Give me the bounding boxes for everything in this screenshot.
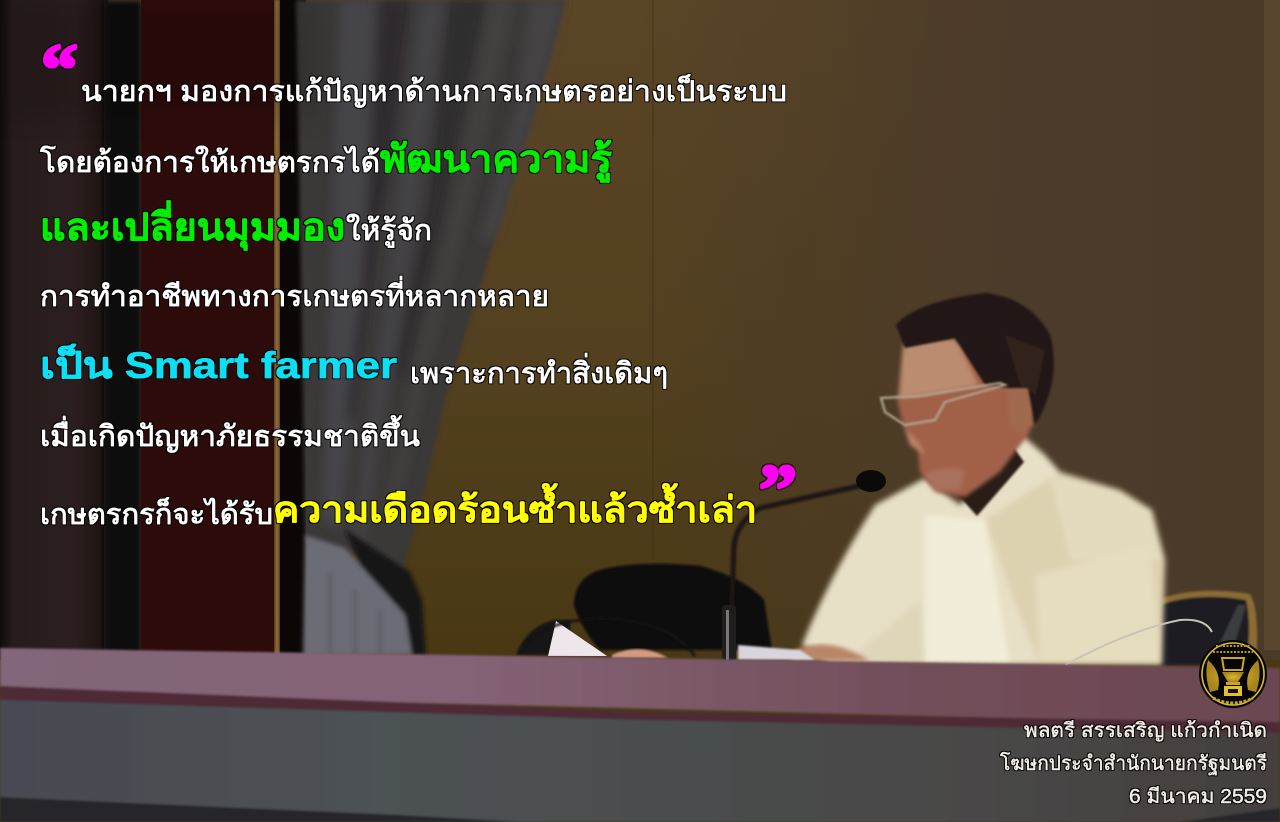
line 1: นายกฯ มองการแก้ปัญหาด้านการเกษตรอย่างเป็นระบบ [81,73,787,108]
person: collar [958,445,1024,516]
line 7 [40,483,757,531]
icon: government seal [1199,640,1267,708]
attribution: date: 6 มีนาคม 2559 [1129,786,1267,808]
icon: closing quote mark: ” [759,450,797,530]
person: hair [896,293,1054,425]
person: head [897,338,1040,497]
paper [548,621,607,656]
left dark panel [0,0,108,660]
line 2: โดยต้องการให้เกษตรกรได้ [40,145,380,179]
line 2: พัฒนาความรู้ [380,139,613,183]
table top [0,648,1280,822]
line 7: เกษตรกรก็จะได้รับ [40,496,273,531]
line 7: ความเดือดร้อนซ้ำแล้วซ้ำเล่า [273,483,757,530]
person: jacket [802,435,1165,665]
line 3: และเปลี่ยนมุมมอง [40,200,345,251]
chair left [574,564,772,650]
mic cables and stem [520,484,868,658]
line 5: เพราะการทำสิ่งเดิมๆ [410,353,668,390]
line 3: ให้รู้จัก [346,213,432,248]
chair right [1160,591,1257,665]
person: glasses [881,383,1005,425]
line 2 [40,139,613,183]
left vignette [0,0,320,120]
person: hands [790,645,870,661]
curtain folds [322,0,565,540]
mic wire right [1065,620,1212,665]
red panel [141,0,274,660]
attribution: name: พลตรี สรรเสริญ แก้วกำเนิด [1024,720,1267,742]
mic base left [516,620,570,655]
icon: opening quote mark: “ [41,29,78,109]
line 5: เป็น Smart farmer [40,342,397,386]
line 3 [40,200,432,251]
line 4: การทำอาชีพทางการเกษตรที่หลากหลาย [40,276,549,313]
curtain lower drape and tie [303,530,426,655]
line 6: เมื่อเกิดปัญหาภัยธรรมชาติขึ้น [40,415,420,453]
line 5 [40,342,668,390]
curtain [296,0,566,570]
attribution: position: โฆษกประจำสำนักนายกรัฐมนตรี [1000,752,1267,775]
